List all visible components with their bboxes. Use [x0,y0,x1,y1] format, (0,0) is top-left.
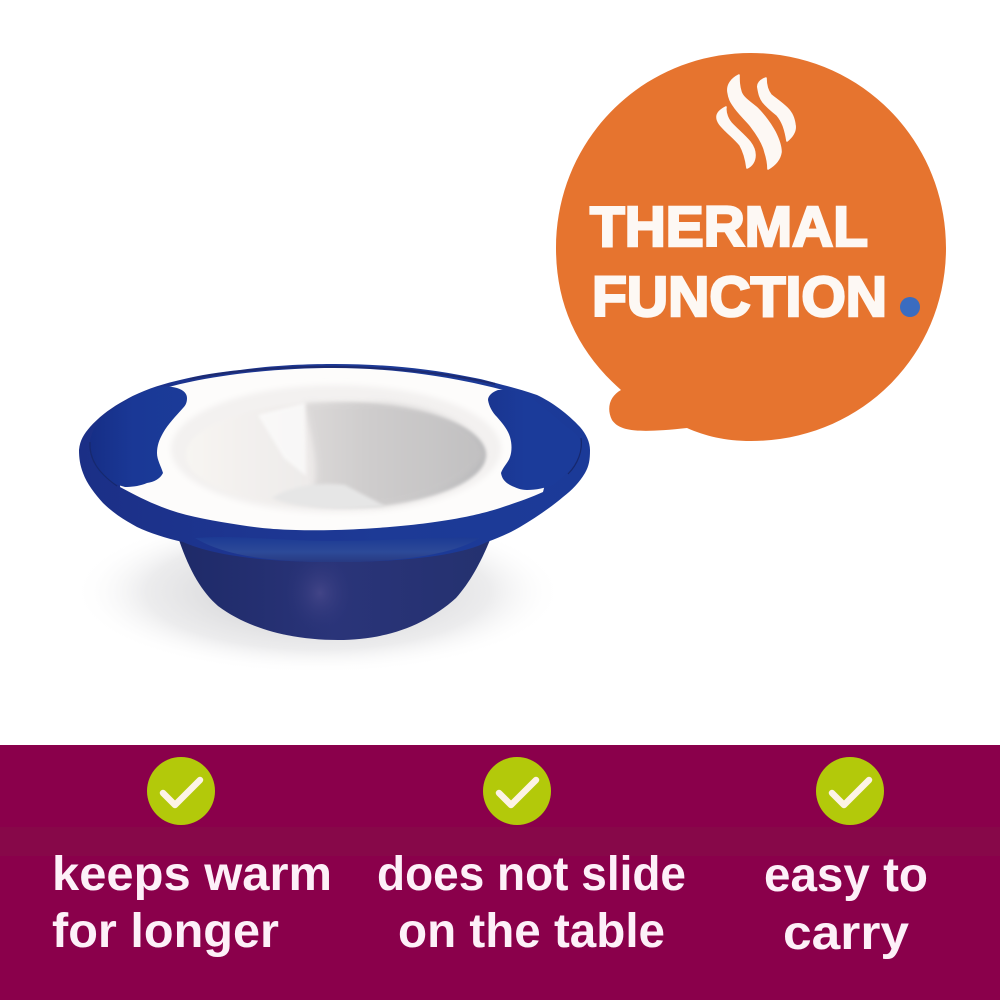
heading: FUNCTION: FUNCTION [592,265,887,329]
well halo [171,385,501,513]
right handle lip line [568,438,581,474]
label: on the table [398,905,665,958]
white bowl surface [120,368,547,530]
icon: check [483,757,551,825]
label: does not slide [377,848,686,901]
icon: heat waves [717,75,795,169]
benefit: keeps warm [52,757,332,958]
rim top dark line [190,367,495,384]
well highlight [258,403,306,476]
rim underside band [195,537,480,562]
speech bubble: thermal function [556,53,946,441]
benefit: easy to carry [764,757,928,960]
body highlight [284,551,356,635]
band background [0,745,1000,1000]
product photo: blue thermal bowl [73,364,590,674]
right handle [488,390,580,490]
label: easy to [764,849,928,902]
left handle [90,386,187,487]
panel: benefits band [0,745,1000,1000]
icon: check [147,757,215,825]
bubble shape [556,53,946,441]
label: keeps warm [52,848,332,901]
icon: check [816,757,884,825]
well soft shading [305,402,485,506]
inner well [186,402,486,508]
bowl shadow [73,510,563,674]
blue dot [900,297,920,317]
benefit: does not slide [377,757,686,958]
left handle lip line [90,442,117,486]
label: carry [783,907,909,960]
outer rim [79,364,590,562]
bowl body [179,540,490,640]
heading: THERMAL: THERMAL [590,195,868,259]
label: for longer [52,905,279,958]
band tone strip [0,827,1000,856]
well bottom highlight [272,484,385,508]
